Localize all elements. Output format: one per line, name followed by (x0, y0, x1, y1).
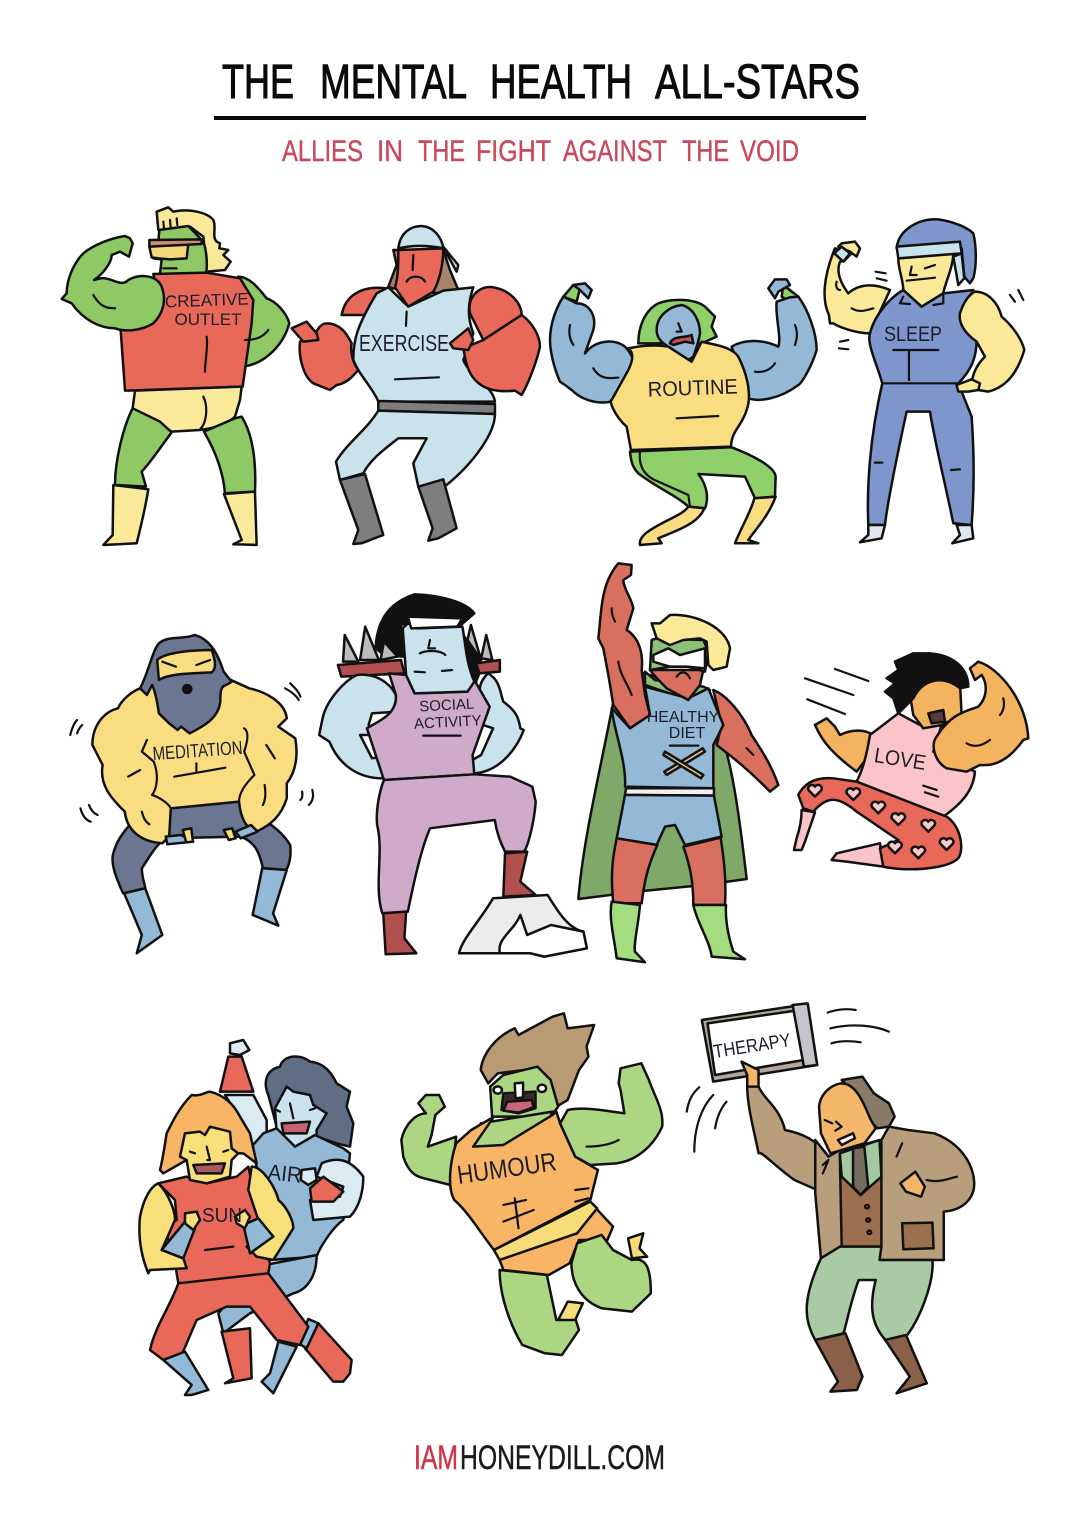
title: HEALTH (490, 56, 632, 109)
wrestler: creative outlet: OUTLET (174, 310, 242, 329)
website footer: IAM (414, 1439, 458, 1477)
subtitle: THE (682, 135, 729, 168)
wrestler: humour (401, 1013, 662, 1355)
wrestler: meditation (70, 635, 313, 953)
shirt label: ROUTINE (647, 375, 738, 402)
subtitle: IN (377, 135, 403, 168)
shirt label: HEALTHY (647, 709, 720, 726)
website footer (414, 1439, 665, 1477)
wrestler: healthy diet: DIET (669, 725, 705, 742)
shirt label: SLEEP (884, 323, 942, 346)
shirt label: LOVE (873, 744, 927, 775)
shirt label: MEDITATION (152, 738, 243, 765)
title: THE (222, 56, 294, 109)
wrestler: healthy diet (578, 563, 778, 962)
wrestler: social activity: ACTIVITY (414, 712, 482, 733)
title: MENTAL (320, 56, 467, 109)
shirt label: SUN (202, 1205, 242, 1227)
subtitle: AGAINST (563, 135, 667, 168)
wrestler: love (794, 653, 1028, 869)
wrestler: therapy with sign (687, 1003, 974, 1393)
subtitle: FIGHT (476, 135, 551, 168)
wrestler: exercise (292, 226, 540, 544)
wrestlers: sun and air (139, 1040, 363, 1395)
title (222, 56, 860, 109)
wrestler: social activity (319, 594, 587, 957)
sign label: THERAPY (712, 1030, 793, 1063)
subtitle: THE (418, 135, 465, 168)
shirt label: EXERCISE (359, 330, 449, 356)
website footer: HONEYDILL.COM (460, 1439, 665, 1477)
shirt label: HUMOUR (455, 1146, 558, 1190)
shirt label: SOCIAL (419, 696, 475, 715)
title underline (214, 116, 866, 120)
wrestler: sleep (825, 219, 1024, 543)
sign (702, 1003, 817, 1082)
wrestler: routine (550, 279, 817, 545)
shirt label: AIR (267, 1159, 303, 1188)
subtitle: ALLIES (282, 135, 363, 168)
subtitle: VOID (740, 135, 799, 168)
wrestler: creative outlet (62, 207, 289, 545)
subtitle (282, 135, 799, 168)
title: ALL-STARS (655, 56, 860, 109)
shirt label: CREATIVE (165, 290, 249, 311)
